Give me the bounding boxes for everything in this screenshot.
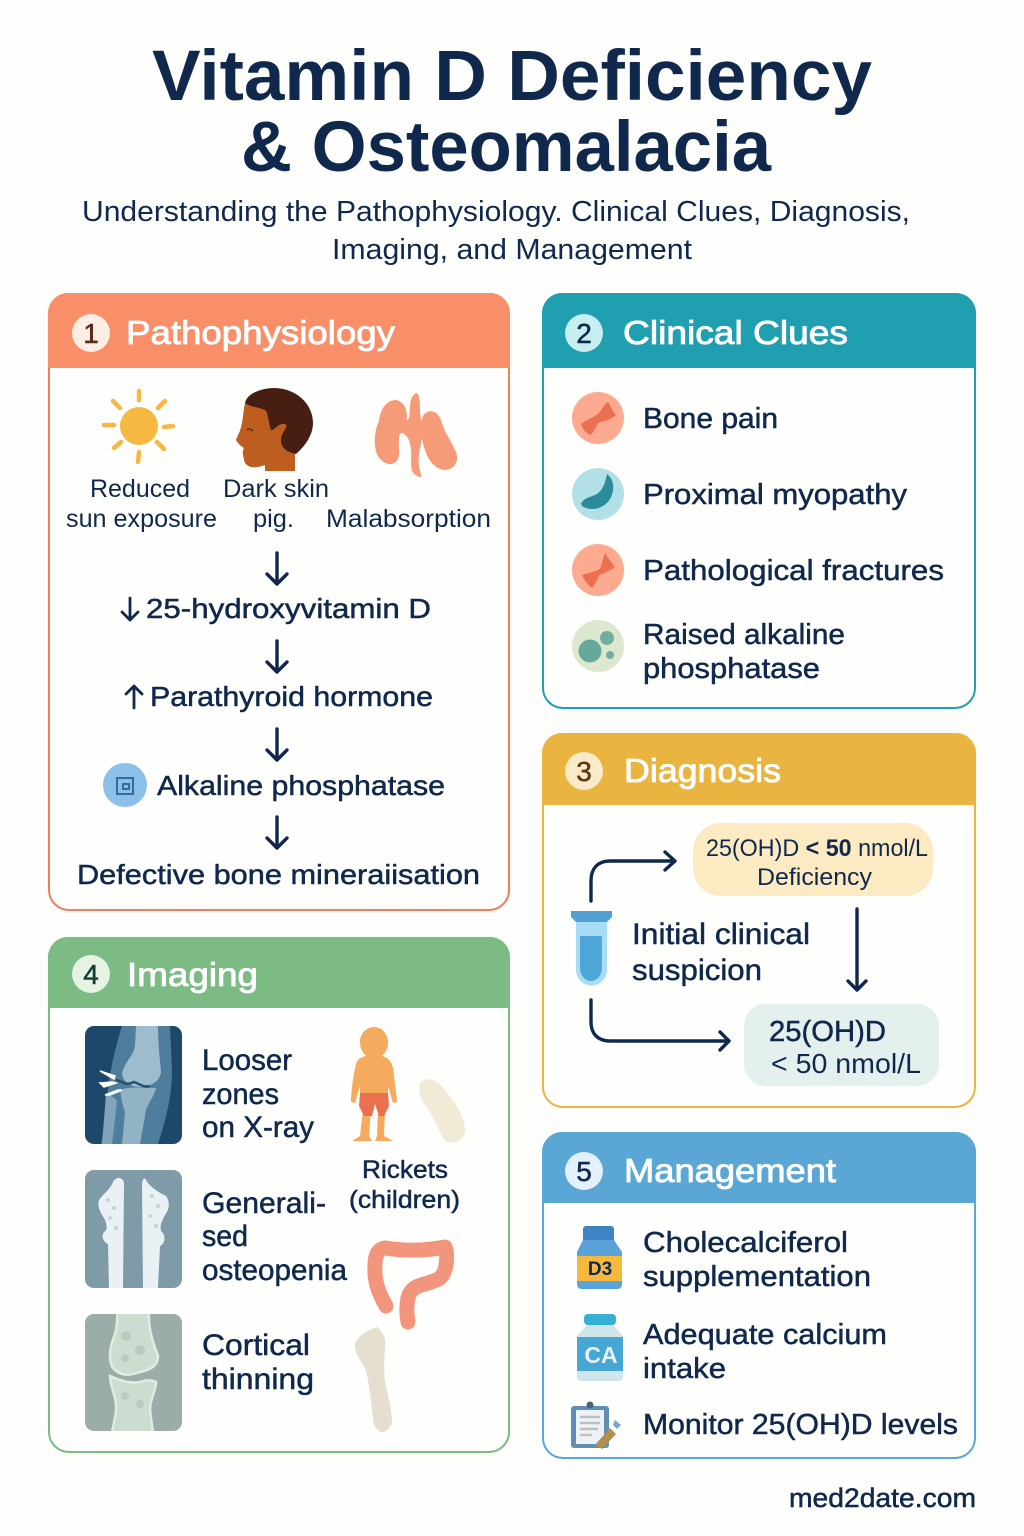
text: cortical thinning: [202, 1329, 314, 1396]
label: rickets: (children): [349, 1186, 460, 1214]
result box: deficiency: 25(OH)D < 50 nmol/L: [706, 835, 928, 862]
image: osteopenia x-ray: [85, 1170, 182, 1288]
text: generalised osteopenia: osteopenia: [202, 1254, 347, 1287]
panel: diagnosis: [542, 733, 976, 1107]
header: management: Management: [624, 1152, 836, 1189]
icon: femur bone: [355, 1327, 392, 1432]
footer: source: med2date.com: [789, 1483, 976, 1513]
arrow: to deficiency: [591, 852, 675, 901]
title: [152, 37, 873, 187]
flow: defective bone mineralisation: Defective bone mineraiisation: [77, 859, 480, 890]
result box: 25(OH)D: 25(OH)D: [769, 1016, 886, 1048]
header: management: [542, 1132, 976, 1203]
label: malabsorption: Malabsorption: [326, 505, 491, 533]
result box: 25(OH)D: < 50 nmol/L: [771, 1048, 921, 1079]
result box: deficiency: [693, 823, 933, 896]
item: calcium: [577, 1314, 887, 1385]
text: cortical thinning: Cortical: [202, 1329, 310, 1362]
result box: deficiency: Deficiency: [757, 864, 872, 891]
header: pathophysiology: Pathophysiology: [126, 314, 396, 351]
text: initial clinical suspicion: [632, 918, 810, 987]
title: Vitamin D Deficiency: [152, 37, 873, 116]
text: initial clinical suspicion: suspicion: [632, 954, 762, 987]
label: dark skin pigmentation: [223, 475, 329, 533]
text: looser zones: zones: [202, 1078, 279, 1111]
subtitle: Understanding the Pathophysiology. Clinical Clues, Diagnosis,: [82, 196, 910, 228]
text: looser zones: [202, 1044, 314, 1144]
header: imaging: 4: [83, 959, 99, 990]
text: generalised osteopenia: sed: [202, 1220, 248, 1253]
label: rickets: [349, 1156, 460, 1214]
clue: bone pain: [572, 392, 778, 444]
header: management: 5: [576, 1156, 592, 1187]
icon: head: [236, 388, 313, 471]
clue: raised alkaline phosphatase: [572, 619, 845, 685]
item: monitor: [571, 1402, 958, 1449]
header: pathophysiology: [48, 293, 510, 368]
header: clinical clues: Clinical Clues: [623, 314, 848, 351]
icon: test tube: [571, 911, 612, 985]
panel: clinical clues: [542, 293, 976, 708]
text: generalised osteopenia: Generali-: [202, 1187, 326, 1220]
text: initial clinical suspicion: Initial clinical: [632, 918, 810, 951]
flow: alkaline phosphatase: Alkaline phosphatase: [157, 770, 445, 801]
clue: pathological fractures: Pathological fractures: [643, 555, 944, 587]
label: reduced sun exposure: Reduced: [90, 475, 190, 503]
icon: D3 bottle: [577, 1226, 622, 1289]
arrow: down 1: [267, 553, 287, 584]
subtitle: Imaging, and Management: [332, 234, 692, 266]
text: looser zones: on X-ray: [202, 1111, 314, 1144]
item: monitor: Monitor 25(OH)D levels: [643, 1409, 958, 1441]
panel: pathophysiology: [48, 293, 510, 910]
panel: management: [542, 1132, 976, 1458]
clue: proximal myopathy: [572, 468, 908, 520]
header: diagnosis: Diagnosis: [624, 752, 781, 789]
icon: clipboard: [571, 1402, 621, 1449]
icon: bowed bone: [419, 1079, 465, 1143]
clue: pathological fractures: [572, 544, 944, 596]
result box: 25(OH)D: [744, 1004, 939, 1086]
icon: CA bottle: CA: [584, 1342, 618, 1368]
clue: bone pain: Bone pain: [643, 403, 778, 435]
header: pathophysiology: 1: [83, 318, 99, 349]
arrow: deficiency down: [848, 909, 866, 990]
text: cortical thinning: thinning: [202, 1363, 314, 1396]
arrow: to result: [591, 1000, 729, 1050]
icon: bone pain: [572, 392, 624, 444]
flow: alkaline phosphatase: [103, 763, 445, 807]
icon: enzyme: [103, 763, 147, 807]
clue: proximal myopathy: Proximal myopathy: [643, 479, 908, 511]
label: reduced sun exposure: sun exposure: [66, 505, 217, 533]
subtitle: [82, 196, 910, 266]
item: calcium: Adequate calcium: [643, 1319, 887, 1351]
arrow: down 3: [267, 729, 287, 760]
item: calcium: intake: [643, 1353, 726, 1385]
icon: child figure: [351, 1027, 397, 1141]
title: & Osteomalacia: [241, 108, 772, 187]
header: diagnosis: 3: [576, 756, 592, 787]
clue: raised alkaline phosphatase: phosphatase: [643, 653, 820, 685]
header: diagnosis: [542, 733, 976, 805]
header: clinical clues: 2: [576, 318, 592, 349]
label: dark skin pigmentation: pig.: [253, 505, 294, 533]
text: looser zones: Looser: [202, 1044, 292, 1077]
icon: fracture: [572, 544, 624, 596]
icon: D3 bottle: D3: [588, 1259, 612, 1280]
flow: 25-hydroxyvitamin D: 25-hydroxyvitamin D: [146, 593, 431, 624]
item: cholecalciferol: supplementation: [643, 1261, 871, 1293]
arrow: down 4: [267, 817, 287, 848]
image: cortical thinning x-ray: [85, 1312, 182, 1433]
image: knee x-ray: [85, 1026, 182, 1144]
item: cholecalciferol: [577, 1226, 871, 1293]
icon: colon: [375, 1247, 447, 1322]
item: cholecalciferol: Cholecalciferol: [643, 1227, 848, 1259]
icon: muscle: [572, 468, 624, 520]
icon: sun: [104, 391, 173, 462]
header: clinical clues: [542, 293, 976, 368]
header: imaging: [48, 937, 510, 1008]
label: rickets: Rickets: [362, 1156, 448, 1184]
panel: imaging: [48, 937, 510, 1452]
icon: CA bottle: [577, 1314, 623, 1381]
header: imaging: Imaging: [127, 956, 258, 993]
label: dark skin pigmentation: Dark skin: [223, 475, 329, 503]
clue: raised alkaline phosphatase: Raised alkaline: [643, 619, 845, 651]
icon: malabsorption organs: [375, 393, 457, 477]
flow: parathyroid hormone: Parathyroid hormone: [150, 681, 433, 712]
arrow: down 2: [267, 641, 287, 672]
text: generalised osteopenia: [202, 1187, 347, 1287]
label: reduced sun exposure: [66, 475, 217, 533]
icon: cells: [572, 620, 624, 672]
